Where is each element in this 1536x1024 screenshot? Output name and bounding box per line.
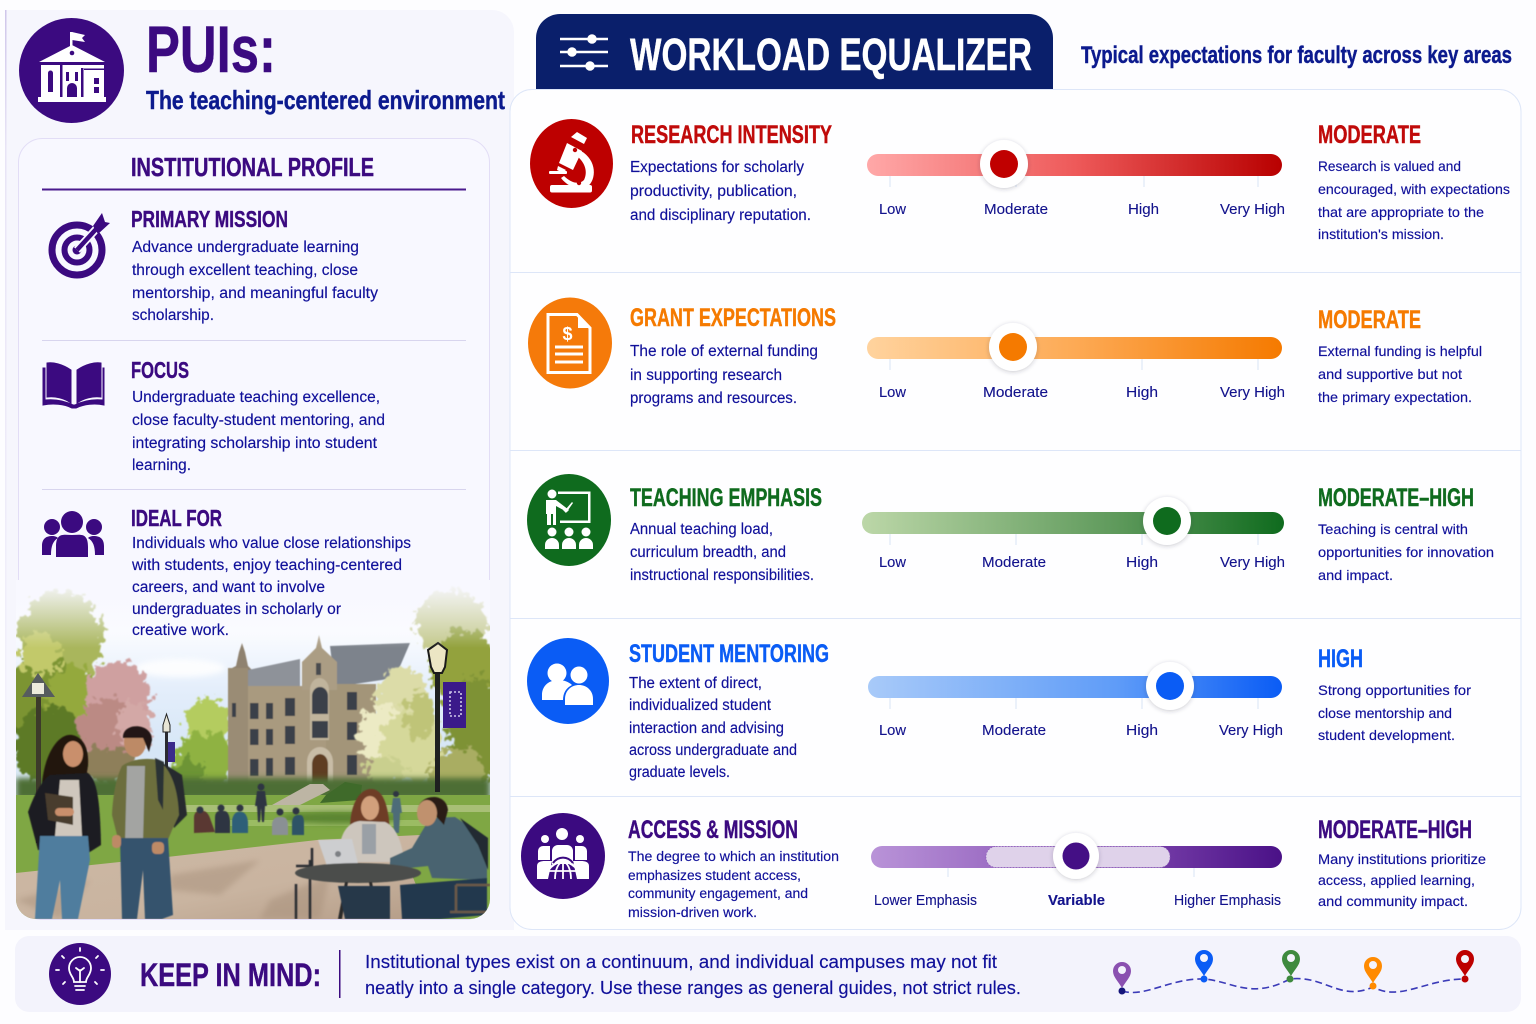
rating: moderate-high: and impact. [1318,567,1393,583]
text: research intensity: productivity, publication, [630,183,797,200]
text: student mentoring: STUDENT MENTORING [629,640,829,668]
slider: grant moderate [867,323,1285,401]
slider: grant moderate: Moderate [983,384,1048,401]
text: grant expectations: programs and resources. [630,390,797,407]
header: workload equalizer: WORKLOAD EQUALIZER [630,29,1032,80]
rating: moderate: MODERATE [1318,306,1421,334]
text block: ideal for: with students, enjoy teaching-centered [131,557,402,574]
text: grant expectations: GRANT EXPECTATIONS [630,304,836,332]
left lamp [22,673,175,843]
rating: moderate-high [1318,816,1486,909]
text block: primary mission [131,206,378,324]
text: access and mission: ACCESS & MISSION [628,816,798,844]
icon: route with pins [1113,950,1474,994]
rating: moderate: and supportive but not [1318,366,1462,382]
header: workload equalizer [536,14,1053,89]
rating: moderate: the primary expectation. [1318,389,1472,405]
trees: back layers [8,590,506,792]
panel: equalizer rows [510,90,1521,930]
text block: focus [131,357,385,474]
text: student mentoring: interaction and advising [629,720,784,737]
icon: school building [19,18,124,123]
text: student mentoring: The extent of direct, [629,675,762,692]
icon: grant document: $ [562,324,573,344]
text: access and mission: The degree to which an institution [628,849,839,864]
icon: target [52,213,110,275]
slider: research moderate: High [1128,201,1159,218]
text block: primary mission: Advance undergraduate learning [132,239,359,256]
slider: grant moderate: Very High [1220,384,1285,401]
row: access and mission [521,813,1486,920]
slider: access variable: Variable [1048,892,1105,909]
icon: teacher [527,474,611,566]
right lamp and banner [428,643,466,792]
rating: high: student development. [1318,727,1455,743]
subtitle: The teaching-centered environment [146,85,505,115]
slider: mentoring high: Low [879,722,906,739]
slider: research moderate [867,140,1285,218]
row: student mentoring [527,638,1471,781]
text block: focus: integrating scholarship into student [132,435,378,452]
photo: campus scene [8,578,506,920]
row: grant expectations [528,298,1482,407]
text block: primary mission: through excellent teaching, close [132,262,358,279]
rating: moderate: MODERATE [1318,121,1421,149]
icon: grant document [528,298,612,388]
top fade [16,585,490,646]
heading: institutional profile: INSTITUTIONAL PROFILE [131,152,374,182]
text: teaching emphasis [630,484,822,584]
text block: primary mission: PRIMARY MISSION [131,206,288,232]
text block: primary mission: mentorship, and meaningful faculty [132,285,378,302]
text block: focus: Undergraduate teaching excellence, [132,389,380,406]
icon: mentor and student [527,638,609,724]
slider: mentoring high: Moderate [982,722,1046,739]
text block: caveat: Institutional types exist on a continuum, and individual campuses may not fit [365,952,997,972]
text: grant expectations [630,304,836,407]
rating: moderate [1318,121,1510,242]
slider: teaching moderate-high: Low [879,554,906,571]
rating: moderate: that are appropriate to the [1318,204,1484,220]
text block: caveat: neatly into a single category. Use these ranges as general guides, not strict rules. [365,978,1021,998]
text: teaching emphasis: TEACHING EMPHASIS [630,484,822,512]
rating: high: close mentorship and [1318,705,1452,721]
row: research intensity [530,119,1510,242]
text block: focus: learning. [132,457,191,474]
text: grant expectations: in supporting research [630,367,782,384]
text: research intensity [630,121,832,224]
slider: grant moderate: Low [879,384,906,401]
seated students and table [295,789,490,919]
rating: high: Strong opportunities for [1318,682,1471,698]
text block: ideal for: creative work. [132,622,229,639]
slider: teaching moderate-high: Moderate [982,554,1046,571]
text: access and mission: community engagement, and [628,886,808,901]
text block: ideal for: careers, and want to involve [132,579,325,596]
text: teaching emphasis: instructional responsibilities. [630,567,814,584]
text block: focus: FOCUS [131,357,189,383]
rating: moderate-high: and community impact. [1318,893,1468,909]
rating: high: HIGH [1318,645,1363,673]
lawn [16,795,490,920]
text: research intensity: RESEARCH INTENSITY [631,121,832,149]
rating: moderate-high: access, applied learning, [1318,872,1475,888]
text block: ideal for [131,505,411,639]
rating: moderate-high: Teaching is central with [1318,521,1468,537]
slider: teaching moderate-high [862,497,1285,571]
rating: moderate-high [1318,484,1494,583]
row: teaching emphasis [527,474,1494,584]
icon: sliders [560,36,608,70]
rating: moderate: institution's mission. [1318,226,1444,242]
text: grant expectations: The role of external funding [630,343,818,360]
icon: light bulb [49,943,111,1005]
rating: moderate-high: MODERATE–HIGH [1318,484,1474,512]
text block: caveat [365,952,1021,998]
icon: book [43,363,104,408]
trees: front blossoms [358,668,440,784]
icon: people group [42,511,104,557]
slider: research moderate: Low [879,201,906,218]
text: student mentoring: graduate levels. [629,764,730,781]
slider: teaching moderate-high: Very High [1220,554,1285,571]
rating: moderate: Research is valued and [1318,158,1461,174]
rating: moderate [1318,306,1482,405]
rating: high [1318,645,1471,743]
slider: access variable: Higher Emphasis [1174,892,1281,909]
title: PUIs: [146,12,276,86]
clouds [135,659,225,677]
rating: moderate-high: opportunities for innovation [1318,544,1494,560]
slider: mentoring high: High [1126,722,1158,739]
hedge [16,778,490,800]
slider: research moderate: Moderate [984,201,1048,218]
text: access and mission: emphasizes student access, [628,868,801,883]
slider: grant moderate: High [1126,384,1158,401]
slider: mentoring high [868,662,1283,739]
rating: moderate-high: MODERATE–HIGH [1318,816,1472,844]
icon: community globe [521,813,605,899]
building [228,635,410,786]
text block: focus: close faculty-student mentoring, and [132,412,385,429]
text block: ideal for: Individuals who value close relationships [132,535,411,552]
walking students [28,726,187,919]
heading: keep in mind: KEEP IN MIND: [140,957,321,993]
slider: research moderate: Very High [1220,201,1285,218]
panel: institutional profile [8,138,506,920]
rating: moderate: External funding is helpful [1318,343,1482,359]
text: teaching emphasis: curriculum breadth, and [630,544,786,561]
text block: ideal for: IDEAL FOR [131,505,222,531]
text: research intensity: Expectations for scholarly [630,159,804,176]
text: access and mission [628,816,839,920]
text: student mentoring [629,640,829,781]
small background students [194,784,402,835]
slider: access variable: Lower Emphasis [874,892,977,909]
slider: mentoring high: Very High [1219,722,1283,739]
text: teaching emphasis: Annual teaching load, [630,521,773,538]
text block: ideal for: undergraduates in scholarly or [132,601,341,618]
panel: left background [6,10,514,930]
text: student mentoring: across undergraduate and [629,742,797,759]
panel: keep in mind [15,936,1521,1012]
icon: microscope [530,119,613,208]
text block: primary mission: scholarship. [132,307,214,324]
text: student mentoring: individualized student [629,697,772,714]
slider: teaching moderate-high: High [1126,554,1158,571]
text: access and mission: mission-driven work. [628,905,757,920]
text: research intensity: and disciplinary reputation. [630,207,811,224]
rating: moderate-high: Many institutions prioritize [1318,851,1486,867]
slider: access variable [871,833,1282,909]
rating: moderate: encouraged, with expectations [1318,181,1510,197]
